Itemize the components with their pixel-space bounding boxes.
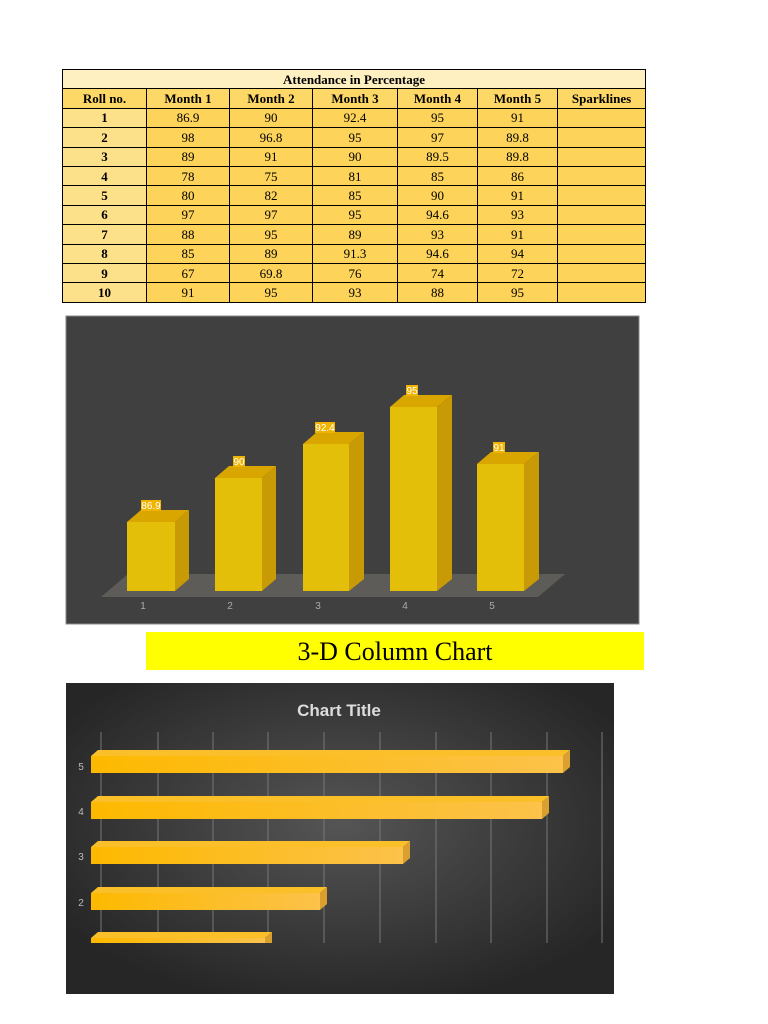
x axis labels: 3 bbox=[315, 601, 321, 612]
column 2: 90 bbox=[233, 457, 245, 468]
column 1 bbox=[127, 500, 189, 591]
table: attendance: Month 2 bbox=[247, 91, 295, 106]
y axis labels: 3 bbox=[78, 852, 84, 863]
table: attendance: 85 bbox=[348, 188, 362, 203]
table: attendance: 3 bbox=[101, 149, 108, 164]
chart title: Chart Title bbox=[297, 701, 381, 720]
table: attendance: 2 bbox=[101, 130, 108, 145]
table: attendance: 81 bbox=[348, 169, 362, 184]
table: attendance: 86.9 bbox=[177, 110, 199, 125]
y axis labels: 2 bbox=[78, 898, 84, 909]
x axis labels: 2 bbox=[227, 601, 233, 612]
table: attendance bbox=[62, 69, 646, 303]
table: attendance: 72 bbox=[511, 266, 524, 281]
y axis labels: 4 bbox=[78, 807, 84, 818]
table: attendance: Month 3 bbox=[331, 91, 379, 106]
table: attendance: 95 bbox=[348, 207, 362, 222]
table: attendance: 93 bbox=[431, 227, 444, 242]
table: attendance: 98 bbox=[182, 130, 194, 145]
table: attendance: 94.6 bbox=[426, 207, 449, 222]
table: attendance: 86 bbox=[511, 169, 524, 184]
table: attendance: 95 bbox=[431, 110, 444, 125]
table: attendance: 97 bbox=[182, 207, 194, 222]
table: attendance: Roll no. bbox=[83, 91, 126, 106]
table: attendance: 97 bbox=[431, 130, 444, 145]
table: attendance: 5 bbox=[101, 188, 108, 203]
x axis labels: 5 bbox=[489, 601, 495, 612]
table: attendance: 69.8 bbox=[260, 266, 282, 281]
column 4: 95 bbox=[406, 386, 418, 397]
table: attendance: Month 4 bbox=[414, 91, 461, 106]
table: attendance: 91 bbox=[511, 227, 524, 242]
table: attendance: 89.8 bbox=[506, 149, 529, 164]
table: attendance: 89.5 bbox=[426, 149, 449, 164]
table: attendance: 97 bbox=[264, 207, 278, 222]
x axis labels: 1 bbox=[140, 601, 146, 612]
table: attendance: 94 bbox=[511, 246, 524, 261]
table: attendance: Sparklines bbox=[572, 91, 631, 106]
table: attendance: 95 bbox=[264, 285, 278, 300]
table: attendance: 95 bbox=[264, 227, 278, 242]
table: attendance: 88 bbox=[182, 227, 194, 242]
table: attendance: 89 bbox=[182, 149, 194, 164]
table: attendance: 90 bbox=[264, 110, 278, 125]
table: attendance: 91 bbox=[182, 285, 194, 300]
table: attendance: 85 bbox=[182, 246, 194, 261]
table: attendance: 88 bbox=[431, 285, 444, 300]
column 2 bbox=[215, 456, 276, 591]
table: attendance: 94.6 bbox=[426, 246, 449, 261]
banner: 3-D Column Chart: 3-D Column Chart bbox=[298, 637, 492, 666]
x axis labels bbox=[140, 601, 495, 612]
column 4 bbox=[390, 385, 452, 591]
table: attendance: 95 bbox=[511, 285, 524, 300]
table: attendance: 91.3 bbox=[344, 246, 366, 261]
table: attendance: 85 bbox=[431, 169, 444, 184]
table: attendance: 4 bbox=[101, 169, 108, 184]
column 3: 92.4 bbox=[315, 423, 335, 434]
table: attendance: 96.8 bbox=[260, 130, 282, 145]
table: attendance: 80 bbox=[182, 188, 194, 203]
table: attendance: 95 bbox=[348, 130, 362, 145]
bars bbox=[91, 750, 570, 943]
table: attendance: 93 bbox=[511, 207, 524, 222]
table: attendance: 90 bbox=[348, 149, 362, 164]
column 1: 86.9 bbox=[141, 501, 161, 512]
table: attendance: 7 bbox=[101, 227, 108, 242]
table: attendance: 75 bbox=[264, 169, 278, 184]
column 3 bbox=[303, 422, 364, 591]
table: attendance: Month 1 bbox=[164, 91, 212, 106]
chart: 3-D bar chart bbox=[66, 683, 614, 994]
table: attendance: Month 5 bbox=[494, 91, 541, 106]
banner: 3-D Column Chart bbox=[146, 632, 644, 670]
table: attendance: 6 bbox=[101, 207, 108, 222]
table: attendance: 1 bbox=[101, 110, 108, 125]
table: attendance: 76 bbox=[348, 266, 362, 281]
table: attendance: 89.8 bbox=[506, 130, 529, 145]
table: attendance: 89 bbox=[348, 227, 362, 242]
table: attendance: 89 bbox=[264, 246, 278, 261]
table: attendance: 67 bbox=[182, 266, 194, 281]
column 5: 91 bbox=[493, 443, 505, 454]
table: attendance: Attendance in Percentage bbox=[283, 72, 425, 87]
y axis labels bbox=[78, 762, 84, 909]
table: attendance: 91 bbox=[511, 188, 524, 203]
y axis labels: 5 bbox=[78, 762, 84, 773]
table: attendance: 90 bbox=[431, 188, 444, 203]
table: attendance: 82 bbox=[264, 188, 278, 203]
table: attendance: 74 bbox=[431, 266, 444, 281]
table: attendance: 91 bbox=[264, 149, 278, 164]
column 5 bbox=[477, 442, 539, 591]
table: attendance: 10 bbox=[98, 285, 111, 300]
table: attendance: 78 bbox=[182, 169, 194, 184]
table: attendance: 9 bbox=[101, 266, 108, 281]
table: attendance: 92.4 bbox=[344, 110, 366, 125]
table: attendance: 91 bbox=[511, 110, 524, 125]
table: attendance: 93 bbox=[348, 285, 362, 300]
x axis labels: 4 bbox=[402, 601, 408, 612]
table: attendance: 8 bbox=[101, 246, 108, 261]
